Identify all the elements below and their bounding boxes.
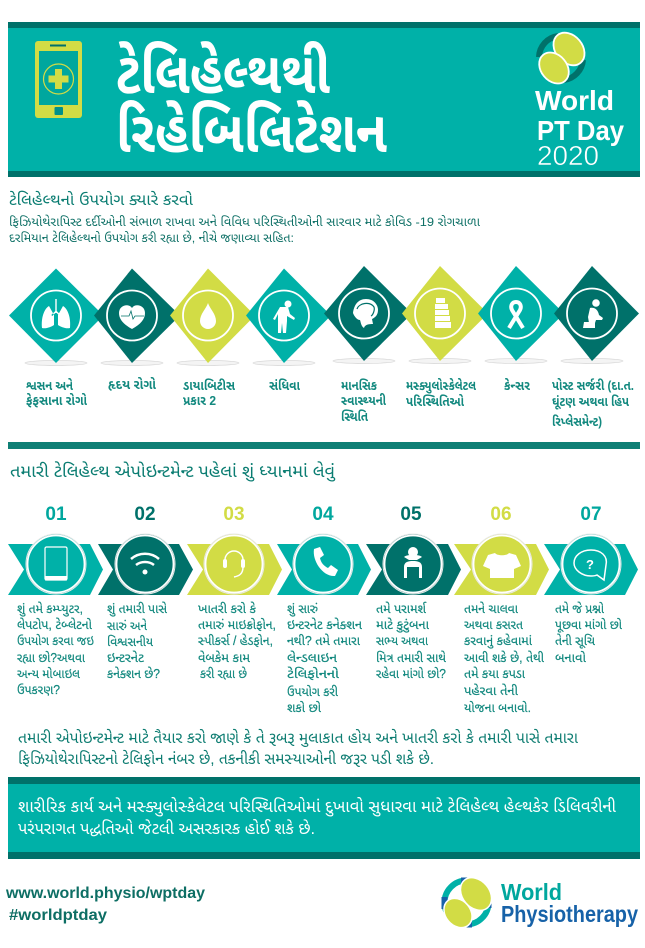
logo: World PT Day 2020: PT Day bbox=[537, 115, 624, 146]
callout banner: શારીરિક કાર્ય અને મસ્ક્યુલોસ્કેલેટલ પરિસ્થિતિઓમાં દુખાવો સુધારવા માટે ટેલિહેલ્થ હેલ્થકેર ડિલિવરીની bbox=[18, 796, 617, 817]
label: musculoskeletal bbox=[406, 377, 477, 409]
label: heart: હૃદય રોગો bbox=[108, 377, 156, 392]
logo: World PT Day 2020: World bbox=[535, 85, 614, 116]
label: diabetes: ડાયાબિટીસ bbox=[183, 378, 235, 393]
step 4 text: લેન્ડલાઇન bbox=[287, 650, 337, 665]
title: રિહેબિલિટેશન bbox=[116, 99, 388, 165]
step 1 text: અન્ય મોબાઇલ bbox=[17, 666, 81, 681]
step 3: headset bbox=[187, 534, 282, 595]
step 4: phone bbox=[277, 534, 371, 595]
step 6 text: તમે કયા કપડા bbox=[464, 666, 526, 681]
step 1 text bbox=[17, 601, 94, 697]
step 6 text bbox=[464, 601, 545, 715]
section heading: before appointment: તમારી ટેલિહેલ્થ એપોઇન્ટમેન્ટ પહેલાં શું ધ્યાનમાં લેવું bbox=[10, 461, 336, 482]
diamond: post surgery bbox=[554, 266, 639, 361]
step numbers: 01 bbox=[45, 504, 67, 525]
step 3 text: કરી રહ્યા છે bbox=[200, 666, 247, 681]
step 6 text: યોજના બનાવો. bbox=[464, 700, 531, 715]
logo: World PT Day 2020: 2020 bbox=[537, 140, 599, 171]
logo: World Physiotherapy: World bbox=[501, 879, 562, 905]
step 2 text: ઇન્ટરનેટ bbox=[107, 650, 144, 665]
label: post surgery bbox=[552, 378, 634, 429]
step 2 text: વિશ્વસનીય bbox=[107, 634, 154, 649]
step numbers: 05 bbox=[400, 504, 422, 525]
chevron process bbox=[8, 534, 638, 595]
step 5 text bbox=[376, 601, 446, 681]
website and hashtag bbox=[5, 885, 205, 924]
website and hashtag: www.world.physio/wptday bbox=[5, 885, 205, 902]
step 7: question bubble: ? bbox=[586, 557, 594, 572]
label: diabetes: પ્રકાર 2 bbox=[183, 393, 216, 408]
callout banner: પરંપરાગત પદ્ધતિઓ જેટલી અસરકારક હોઈ શકે છે. bbox=[18, 818, 315, 838]
preparation note: તમારી એપોઇન્ટમેન્ટ માટે તૈયાર કરો જાણે કે તે રૂબરૂ મુલાકાત હોય અને ખાતરી કરો કે તમારી પાસે તમારા bbox=[18, 729, 578, 748]
label: musculoskeletal: પરિસ્થિતિઓ bbox=[406, 394, 464, 409]
step 5: person bbox=[366, 534, 461, 595]
step 3 text: સ્પીકર્સ / હેડફોન, bbox=[198, 633, 273, 648]
label: post surgery: ઘૂંટણ અથવા હિપ bbox=[552, 394, 629, 410]
step 7: question bubble bbox=[544, 534, 638, 595]
website and hashtag: #worldptday bbox=[9, 907, 107, 924]
label: musculoskeletal: મસ્ક્યુલોસ્કેલેટલ bbox=[406, 377, 477, 394]
divider bbox=[8, 442, 640, 449]
step 7 text: તેની સૂચિ bbox=[555, 633, 596, 649]
intro text: ફિઝિયોથેરાપિસ્ટ દર્દીઓની સંભાળ રાખવા અને વિવિધ પરિસ્થિતીઓની સારવાર માટે કોવિડ -19 રોગચાળા bbox=[9, 215, 481, 229]
step 1 text: ઉપકરણ? bbox=[17, 683, 60, 697]
step 4 text: ઉપયોગ કરી bbox=[287, 684, 339, 699]
step 6 text: આવી શકે છે, તેથી bbox=[464, 650, 545, 665]
condition diamonds bbox=[9, 266, 639, 366]
step 3 text: ખાતરી કરો કે bbox=[198, 601, 257, 616]
step numbers: 06 bbox=[490, 504, 512, 525]
intro text bbox=[9, 215, 481, 245]
label: post surgery: પોસ્ટ સર્જરી (દા.ત. bbox=[552, 378, 634, 393]
logo: World PT Day 2020 bbox=[533, 27, 624, 171]
step 6 text: કરવાનું કહેવામાં bbox=[464, 633, 533, 649]
step 1 text: શું તમે કમ્પ્યુટર, bbox=[17, 601, 83, 617]
callout banner bbox=[8, 777, 640, 859]
step 4 text bbox=[287, 602, 362, 715]
step 5 text: માટે કુટુંબના bbox=[376, 617, 430, 633]
label: mental health: સ્વાસ્થ્યની bbox=[341, 393, 386, 408]
shadows under diamonds bbox=[25, 358, 623, 366]
step 6 text: તમને ચાલવા bbox=[464, 601, 519, 616]
step 2 text: શું તમારી પાસે bbox=[107, 601, 167, 617]
intro text: દરમિયાન ટેલિહેલ્થનો ઉપયોગ કરી રહ્યા છે, નીચે જણાવ્યા સહિત: bbox=[9, 231, 294, 245]
label: respiratory: ફેફસાના રોગો bbox=[26, 392, 87, 408]
step 1 text: લેપટોપ, ટેબ્લેટનો bbox=[17, 617, 93, 632]
label: respiratory: શ્વસન અને bbox=[26, 377, 73, 393]
diamond: mental health bbox=[324, 266, 412, 361]
header banner bbox=[8, 22, 640, 177]
step 2 text: સારું અને bbox=[107, 618, 147, 633]
step 7 text: પૂછવા માંગો છો bbox=[555, 617, 623, 633]
step numbers: 03 bbox=[223, 504, 245, 525]
label: respiratory bbox=[26, 377, 87, 408]
step 6: shirt bbox=[454, 534, 549, 595]
step 2 text bbox=[107, 601, 167, 681]
condition labels bbox=[26, 377, 634, 429]
step 6 text: પહેરવા તેની bbox=[464, 683, 519, 698]
diamond: cancer bbox=[478, 266, 564, 361]
step numbers: 07 bbox=[580, 504, 602, 525]
step 1 text: ઉપયોગ કરવા જઇ bbox=[17, 633, 94, 648]
diamond: musculoskeletal bbox=[402, 266, 488, 361]
preparation note: ફિઝિયોથેરાપિસ્ટનો ટેલિફોન નંબર છે, તકનીકી સમસ્યાઓની જરૂર પડી શકે છે. bbox=[18, 750, 434, 768]
step 4 text: ટેલિફોનનો bbox=[287, 666, 340, 681]
step 7 text: તમે જે પ્રશ્નો bbox=[555, 601, 605, 616]
label: arthritis: સંધિવા bbox=[269, 378, 300, 393]
step 2: wifi bbox=[98, 534, 193, 595]
label: mental health bbox=[341, 378, 386, 424]
step 4 text: શકો છો bbox=[287, 700, 322, 715]
icon: phone with medical cross bbox=[35, 41, 82, 118]
label: mental health: માનસિક bbox=[341, 378, 377, 393]
title: ટેલિહેલ્થથી bbox=[116, 40, 330, 106]
step 5 text: સભ્ય અથવા bbox=[376, 634, 429, 648]
label: mental health: સ્થિતિ bbox=[341, 409, 369, 424]
step 3 text bbox=[198, 601, 276, 681]
step 7 text: બનાવો bbox=[555, 650, 587, 665]
diamond: respiratory bbox=[9, 268, 104, 363]
step numbers: 02 bbox=[134, 504, 156, 525]
step 1: device bbox=[8, 534, 103, 595]
label: post surgery: રિપ્લેસમેન્ટ) bbox=[552, 413, 602, 429]
step numbers bbox=[45, 504, 602, 525]
step texts bbox=[17, 601, 623, 715]
step 4 text: નથી? તમે તમારા bbox=[287, 633, 361, 648]
step 3 text: વેબકેમ કામ bbox=[198, 650, 251, 665]
step 3 text: તમારું માઇક્રોફોન, bbox=[198, 617, 276, 632]
step 6 text: અથવા કસરત bbox=[464, 618, 524, 632]
diamond: arthritis bbox=[246, 268, 331, 363]
section heading: when to use telehealth: ટેલિહેલ્થનો ઉપયોગ ક્યારે કરવો bbox=[9, 189, 194, 209]
diamond: diabetes bbox=[170, 268, 255, 363]
step 4 text: ઇન્ટરનેટ કનેક્શન bbox=[287, 617, 362, 632]
step 7 text bbox=[555, 601, 623, 665]
label: diabetes bbox=[183, 378, 235, 408]
step 5 text: તમે પરામર્શ bbox=[376, 601, 427, 616]
step 5 text: રહેવા માંગો છો? bbox=[376, 666, 446, 681]
diamond: heart disease bbox=[94, 268, 180, 363]
step 1 text: રહ્યા છો?અથવા bbox=[17, 650, 86, 665]
step 5 text: મિત્ર તમારી સાથે bbox=[376, 650, 446, 665]
title bbox=[116, 40, 388, 165]
preparation note bbox=[18, 729, 578, 768]
label: cancer: કેન્સર bbox=[504, 377, 531, 393]
step 2 text: કનેક્શન છે? bbox=[107, 666, 160, 681]
step 4 text: શું સારું bbox=[287, 602, 318, 617]
step numbers: 04 bbox=[312, 504, 334, 525]
logo: World Physiotherapy bbox=[438, 872, 638, 933]
